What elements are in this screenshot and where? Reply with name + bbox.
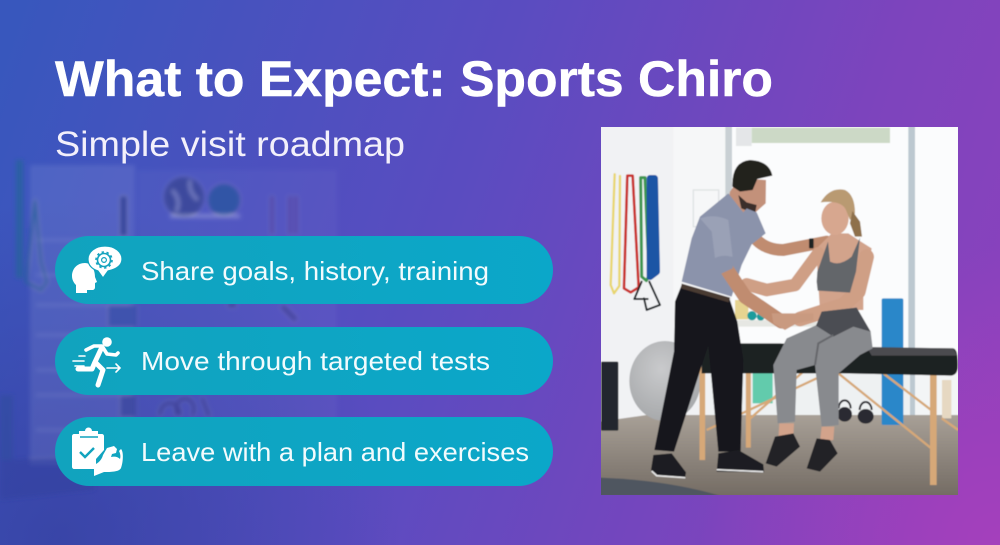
icon: clipboard and flexed arm bbox=[72, 428, 123, 476]
man lower arm bbox=[725, 267, 782, 322]
woman leggings bbox=[773, 308, 873, 427]
floor bbox=[600, 415, 960, 497]
icon: runner with motion lines bbox=[73, 337, 120, 385]
faded gym background scene bbox=[0, 160, 337, 500]
belt bbox=[681, 284, 730, 302]
hands bbox=[772, 313, 813, 330]
step 2 text: Move through targeted tests bbox=[141, 346, 490, 376]
woman arms bbox=[747, 253, 818, 290]
foam roller bbox=[601, 362, 618, 431]
title: What to Expect: Sports Chiro bbox=[55, 51, 773, 107]
woman head bbox=[821, 202, 849, 235]
step 1 pill bbox=[55, 236, 553, 304]
woman torso and shoulders bbox=[817, 233, 872, 310]
woman ankles bbox=[778, 423, 834, 442]
photo: chiropractor assessing patient bbox=[600, 125, 960, 497]
man trousers bbox=[654, 285, 743, 452]
step 1 text: Share goals, history, training bbox=[141, 256, 489, 286]
blue roller bbox=[882, 298, 903, 425]
table legs bbox=[702, 367, 958, 485]
table top bbox=[702, 343, 958, 376]
wall and window bbox=[600, 125, 960, 497]
woman shoes bbox=[766, 433, 800, 467]
subtitle: Simple visit roadmap bbox=[55, 125, 405, 164]
kettlebells bbox=[837, 407, 874, 424]
exercise ball bbox=[629, 341, 701, 421]
man shirt bbox=[682, 193, 766, 297]
step 3 pill bbox=[55, 417, 553, 486]
step 3 text: Leave with a plan and exercises bbox=[141, 437, 529, 467]
man shoes bbox=[651, 453, 686, 478]
resistance bands bbox=[611, 174, 660, 310]
man neck and head bbox=[728, 178, 766, 217]
woman sports top bbox=[817, 238, 860, 293]
step 2 pill bbox=[55, 327, 553, 395]
icon: head with gear speech bubble bbox=[72, 246, 122, 293]
man raised arm bbox=[757, 240, 827, 250]
